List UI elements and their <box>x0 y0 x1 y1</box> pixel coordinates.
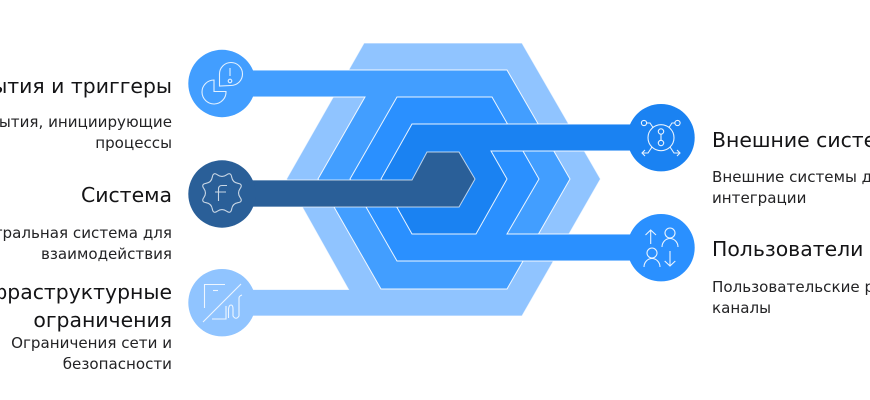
heading: system: Система <box>81 183 172 207</box>
icon: gear with letter f <box>203 174 241 212</box>
icon: connected nodes with arrows <box>641 120 680 156</box>
layer: core hexagon with system bar <box>188 152 475 228</box>
text: events description: процессы <box>95 134 172 152</box>
text: external systems description <box>712 168 870 207</box>
heading: infrastructure constraints: ограничения <box>33 308 172 332</box>
text: constraints description: безопасности <box>63 355 172 373</box>
text: constraints description <box>11 334 172 373</box>
icon: alert bubble and pie chart <box>202 63 242 104</box>
layer: fourth hexagon with external systems bar <box>381 104 695 234</box>
icon: users with up and down arrows <box>644 228 678 267</box>
heading: infrastructure constraints <box>0 280 172 332</box>
text: external systems description: интеграции <box>712 189 806 207</box>
icon: crossed-out fuel pump <box>203 284 242 322</box>
text: users description: каналы <box>712 299 771 317</box>
text: users description <box>712 278 870 317</box>
layer: outer hexagon with infrastructure bar <box>188 43 601 336</box>
text: system description <box>0 224 172 263</box>
text: system description: взаимодействия <box>41 245 172 263</box>
heading: users: Пользователи <box>712 237 863 261</box>
layer: second hexagon with events bar <box>188 50 570 289</box>
layer: third hexagon with users bar <box>350 97 695 281</box>
text: events description <box>0 113 172 152</box>
text: constraints description: Ограничения сети и <box>11 334 172 352</box>
